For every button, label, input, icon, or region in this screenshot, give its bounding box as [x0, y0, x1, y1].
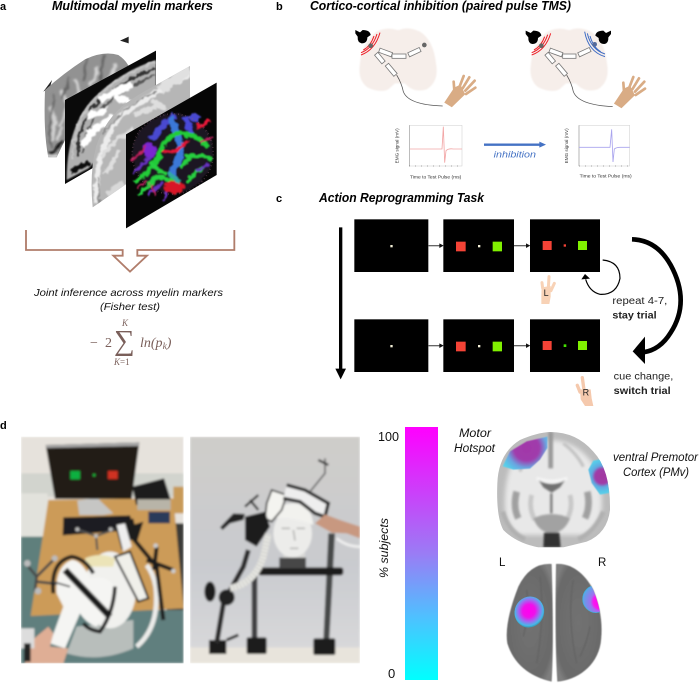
mannequin — [284, 554, 305, 558]
row 2 switch trial screens — [354, 319, 600, 372]
coronal brain with overlays — [493, 430, 613, 550]
overlay: motor hotspot — [503, 437, 547, 470]
label: Motor Hotspot: Hotspot — [454, 443, 496, 455]
tracker and arm — [27, 559, 58, 592]
x label: Time to Test Pulse (ms) — [580, 174, 632, 179]
overlay: PMv — [588, 459, 609, 495]
formula: Fisher statistic: K=1 — [113, 357, 130, 367]
colour bar label 100: 100 — [378, 429, 399, 444]
slice 4: colour DTI map — [126, 82, 217, 228]
neuron chain — [375, 48, 421, 76]
overlay: motor hotspot axial — [509, 592, 549, 632]
formula: Fisher statistic: k — [163, 342, 168, 352]
slice 1: grey T1 map — [44, 36, 129, 158]
slice 3: light contrast map — [88, 63, 192, 210]
text: stay trial — [612, 296, 667, 321]
text: joint inference: Joint inference across myelin markers — [33, 287, 224, 299]
x label: Time to Test Pulse (ms) — [410, 175, 462, 180]
formula: Fisher statistic: ) — [166, 336, 172, 351]
text: switch trial — [614, 371, 673, 397]
colour bar — [405, 427, 438, 680]
colour bar label 0: 0 — [388, 666, 395, 681]
brain silhouette — [530, 28, 608, 91]
arrow: inhibition — [484, 142, 546, 160]
arrow: time axis — [335, 227, 346, 379]
formula: Fisher statistic: K — [121, 318, 129, 328]
monitor — [46, 442, 139, 499]
hand — [446, 76, 475, 106]
label: ventral premotor cortex: ventral Premotor — [613, 452, 699, 464]
blue pulses — [585, 32, 605, 57]
hand — [25, 627, 68, 663]
label L: L — [499, 557, 506, 569]
task diagram — [335, 219, 681, 406]
text: switch trial: cue change, — [614, 371, 673, 382]
text: stay trial: repeat 4-7, — [612, 296, 667, 307]
arrow: big switch arrow — [632, 239, 681, 364]
red pulses — [532, 33, 551, 55]
trackers — [245, 495, 258, 510]
panel label c: c — [276, 193, 282, 205]
label: Motor Hotspot: Motor — [459, 428, 492, 440]
keyboard — [63, 515, 135, 535]
panel d: neuronavigation and stimulation maps — [0, 420, 699, 682]
panel b: cortico-cortical inhibition — [276, 0, 645, 180]
hand L: L — [544, 288, 549, 298]
right coil — [595, 31, 611, 44]
neuron chain — [545, 48, 591, 76]
colour bar axis title: % subjects — [377, 518, 391, 578]
hand R — [577, 378, 593, 406]
formula: Fisher statistic — [90, 318, 172, 367]
axial brain with overlays — [507, 564, 609, 682]
efferent fibre — [567, 75, 613, 107]
hand — [615, 77, 645, 107]
slice 2: dark contrast map — [65, 51, 156, 184]
head and coil — [84, 552, 136, 628]
label inhibition: inhibition — [494, 150, 536, 160]
brain maps — [493, 430, 613, 682]
photographs — [21, 437, 360, 663]
overlay: PMv axial — [582, 586, 600, 613]
bracket arrow — [26, 230, 234, 272]
hose — [230, 534, 268, 588]
arrow: stay loop — [581, 260, 620, 294]
photo: TMS coil setup at desk — [21, 437, 184, 663]
panel label a: a — [0, 1, 7, 13]
photo: coil on mannequin head — [190, 437, 360, 663]
panel label d: d — [0, 420, 7, 432]
panel a: multimodal myelin markers — [0, 0, 234, 367]
coil — [355, 30, 371, 43]
formula: Fisher statistic: ∑ — [114, 325, 135, 357]
text: stay trial: stay trial — [612, 310, 657, 321]
chair — [67, 620, 133, 657]
left coil — [526, 31, 541, 44]
formula: Fisher statistic: ln(p — [140, 336, 163, 351]
brain image stack — [26, 37, 234, 272]
brain silhouette — [359, 28, 437, 91]
text: switch trial: switch trial — [614, 386, 671, 397]
hand L — [541, 277, 554, 304]
hand R: R — [583, 387, 590, 397]
chart: EMG after — [564, 125, 632, 179]
hand and arm — [315, 514, 360, 538]
y label: EMG signal (mV) — [394, 128, 399, 163]
articulated arm — [217, 550, 248, 643]
schematic: paired pulse brain — [526, 28, 645, 107]
formula: Fisher statistic: − 2 — [90, 336, 112, 351]
title: action reprogramming task: Action Reprogramming Task — [318, 191, 485, 205]
panel label b: b — [276, 1, 283, 13]
schematics and charts — [355, 28, 645, 180]
row 1 stay trial screens — [354, 219, 600, 272]
text: Fisher test: (Fisher test) — [100, 301, 160, 313]
stand — [252, 573, 257, 640]
EMG trace blue — [579, 129, 630, 162]
efferent fibre — [397, 75, 443, 106]
cable — [137, 565, 156, 647]
chart: EMG before — [394, 125, 462, 180]
equipment — [132, 478, 171, 505]
red pulses — [361, 33, 380, 55]
label R: R — [598, 557, 606, 569]
panel c: action reprogramming task — [276, 191, 681, 406]
schematic: single pulse brain — [355, 28, 475, 106]
EMG trace red — [410, 127, 462, 163]
label: ventral premotor cortex: Cortex (PMv) — [623, 467, 689, 479]
y label: EMG signal (mV) — [564, 128, 569, 163]
coil on head — [272, 503, 313, 525]
